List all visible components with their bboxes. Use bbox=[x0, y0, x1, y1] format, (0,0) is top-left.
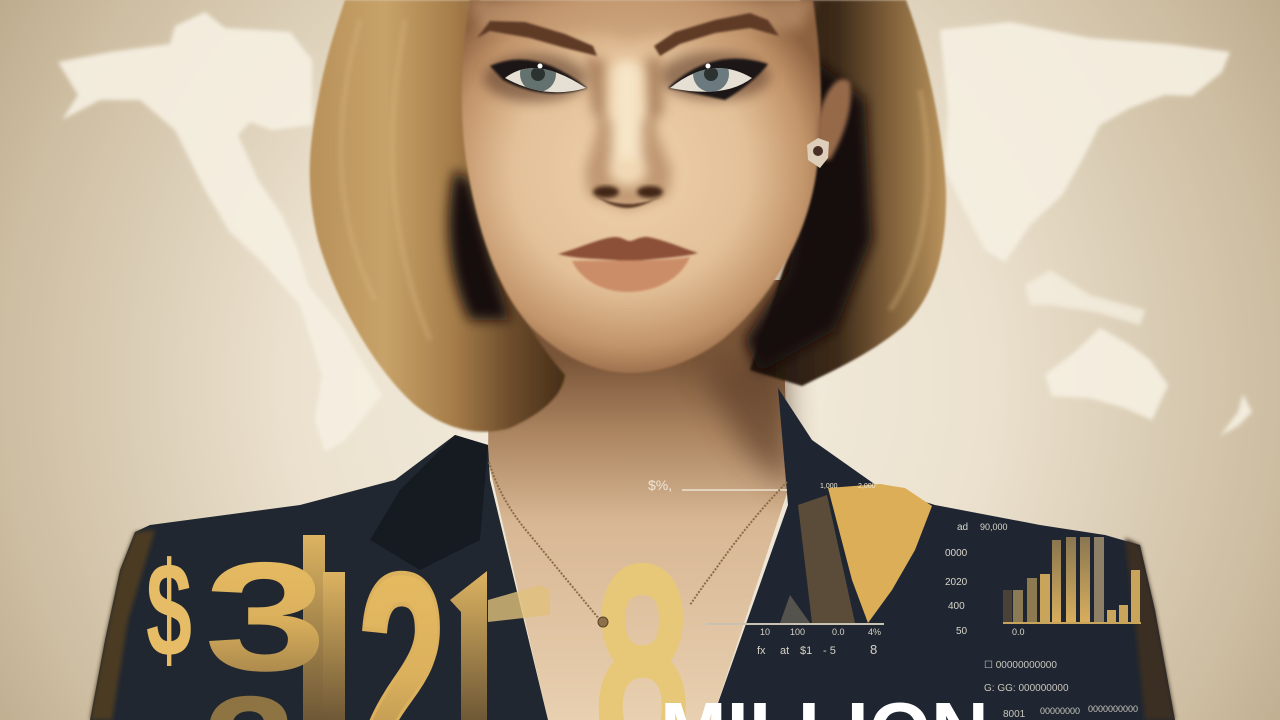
bar chart labels: 0000 bbox=[945, 548, 968, 559]
legend rows: 00000000 bbox=[1040, 706, 1080, 716]
chart labels along collar: 1,000 bbox=[820, 483, 838, 490]
line chart axis bbox=[706, 623, 884, 657]
legend rows: G: GG: 000000000 bbox=[984, 683, 1069, 694]
bar chart labels: 50 bbox=[956, 626, 968, 637]
legend rows: 0000000000 bbox=[1088, 704, 1138, 714]
chart labels along collar bbox=[648, 477, 876, 493]
line chart axis: 100 bbox=[790, 627, 805, 637]
necklace bbox=[489, 462, 787, 620]
brow bridge shadows bbox=[585, 55, 664, 130]
neck and chest bbox=[488, 280, 788, 720]
grey triangle bbox=[780, 595, 810, 623]
hair: right bbox=[750, 0, 946, 386]
line chart axis: 8 bbox=[870, 642, 877, 657]
bar chart labels: 2020 bbox=[945, 577, 968, 588]
line chart axis: - 5 bbox=[823, 645, 836, 657]
left eye bbox=[490, 56, 587, 93]
bar chart labels: ad bbox=[957, 522, 968, 533]
line chart axis: fx bbox=[757, 645, 766, 657]
chart labels along collar: $%, bbox=[648, 477, 672, 493]
hair: left bbox=[310, 0, 565, 432]
line chart axis: at bbox=[780, 645, 789, 657]
number one bbox=[450, 571, 550, 720]
brown triangle stripe bbox=[798, 495, 855, 623]
jacket: right shoulder edge bbox=[1125, 538, 1175, 720]
hair: dark behind right jaw bbox=[745, 60, 872, 372]
ear bbox=[816, 79, 851, 160]
map: New Zealand bbox=[1220, 394, 1252, 436]
legend rows: ☐ 00000000000 bbox=[984, 660, 1057, 671]
jacket: left lapel bbox=[370, 435, 488, 570]
lips bbox=[558, 237, 698, 292]
map: Southeast Asia bbox=[1025, 270, 1145, 325]
gold triangle panel bbox=[828, 484, 932, 623]
number three: 3 bbox=[204, 531, 327, 703]
bar chart labels: 90,000 bbox=[980, 522, 1008, 532]
right eye bbox=[668, 56, 768, 100]
jacket: shoulder edge left bbox=[90, 530, 155, 720]
legend rows bbox=[984, 660, 1138, 720]
upper lip bbox=[558, 237, 698, 262]
right eyebrow bbox=[654, 13, 779, 56]
forehead tone bbox=[470, 0, 813, 40]
bar chart labels bbox=[945, 522, 1025, 637]
jacket: left side bbox=[90, 435, 548, 720]
line chart axis: 10 bbox=[760, 627, 770, 637]
face bbox=[462, 0, 821, 373]
bar chart labels: 0.0 bbox=[1012, 627, 1025, 637]
line chart axis: 4% bbox=[868, 627, 881, 637]
chart labels along collar: 2,000 bbox=[858, 483, 876, 490]
world map bbox=[58, 12, 1252, 452]
neck shadow bbox=[700, 350, 790, 490]
hair: streaks bbox=[341, 20, 928, 340]
necklace pendant bbox=[598, 617, 608, 627]
dollar sign: $ bbox=[146, 534, 192, 685]
lower lip bbox=[572, 257, 690, 292]
bar chart labels: 400 bbox=[948, 601, 965, 612]
legend rows: 8001 bbox=[1003, 709, 1026, 720]
line chart axis: 0.0 bbox=[832, 627, 845, 637]
map: Australia bbox=[1045, 328, 1168, 420]
nose bbox=[585, 60, 672, 210]
jacket: right side bbox=[712, 388, 1175, 720]
line chart axis: $1 bbox=[800, 645, 812, 657]
hair: shadow beside left jaw bbox=[449, 170, 510, 320]
bar chart bbox=[1003, 537, 1141, 624]
earring bbox=[807, 138, 829, 168]
eye shadows bbox=[483, 52, 770, 102]
left eyebrow bbox=[477, 21, 597, 56]
map: Americas bbox=[58, 12, 382, 452]
map: Eurasia and Africa bbox=[940, 22, 1230, 262]
